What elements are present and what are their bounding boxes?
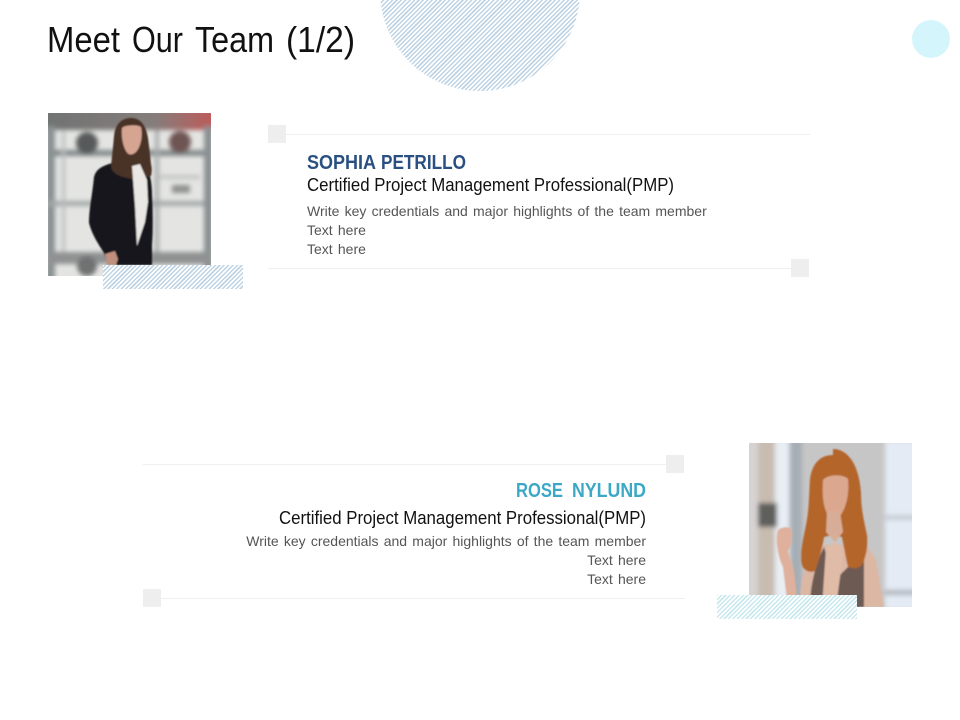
striped accent under photo 2	[717, 595, 857, 619]
corner square bottom right	[791, 259, 809, 277]
description: Rose Nylund: Write key credentials and major highlights of the team member	[246, 533, 646, 549]
corner square bottom left	[143, 589, 161, 607]
striped accent under photo 1	[103, 265, 243, 289]
panel: Rose Nylund details	[143, 455, 685, 607]
description: Sophia Petrillo: Text here	[307, 241, 366, 257]
name: Rose Nylund: ROSE	[516, 480, 563, 502]
name: Sophia Petrillo: SOPHIA	[307, 152, 376, 174]
role: Sophia Petrillo: Certified Project Management Professional(PMP)	[307, 175, 674, 195]
corner square top right	[666, 455, 684, 473]
description: Rose Nylund: Text here	[587, 552, 646, 568]
panel: Sophia Petrillo details	[268, 125, 810, 277]
title: Our	[132, 19, 183, 60]
title: Team	[195, 19, 274, 60]
corner square top left	[268, 125, 286, 143]
decorative striped semicircle	[380, 0, 580, 91]
description: Rose Nylund: Text here	[587, 571, 646, 587]
title: Meet	[47, 19, 120, 60]
description: Sophia Petrillo	[307, 203, 707, 257]
name: Sophia Petrillo: PETRILLO	[381, 152, 466, 174]
photo: Sophia Petrillo	[44, 109, 215, 281]
name: Rose Nylund: NYLUND	[572, 480, 646, 502]
decorative light blue circle	[912, 20, 950, 58]
name: Rose Nylund	[516, 480, 646, 502]
role: Rose Nylund: Certified Project Management Professional(PMP)	[279, 508, 646, 528]
title: (1/2)	[286, 19, 355, 60]
photo: Rose Nylund	[745, 440, 917, 610]
description: Sophia Petrillo: Write key credentials and major highlights of the team member	[307, 203, 707, 219]
description: Sophia Petrillo: Text here	[307, 222, 366, 238]
description: Rose Nylund	[246, 533, 646, 587]
name: Sophia Petrillo	[307, 152, 466, 174]
title	[47, 19, 355, 60]
